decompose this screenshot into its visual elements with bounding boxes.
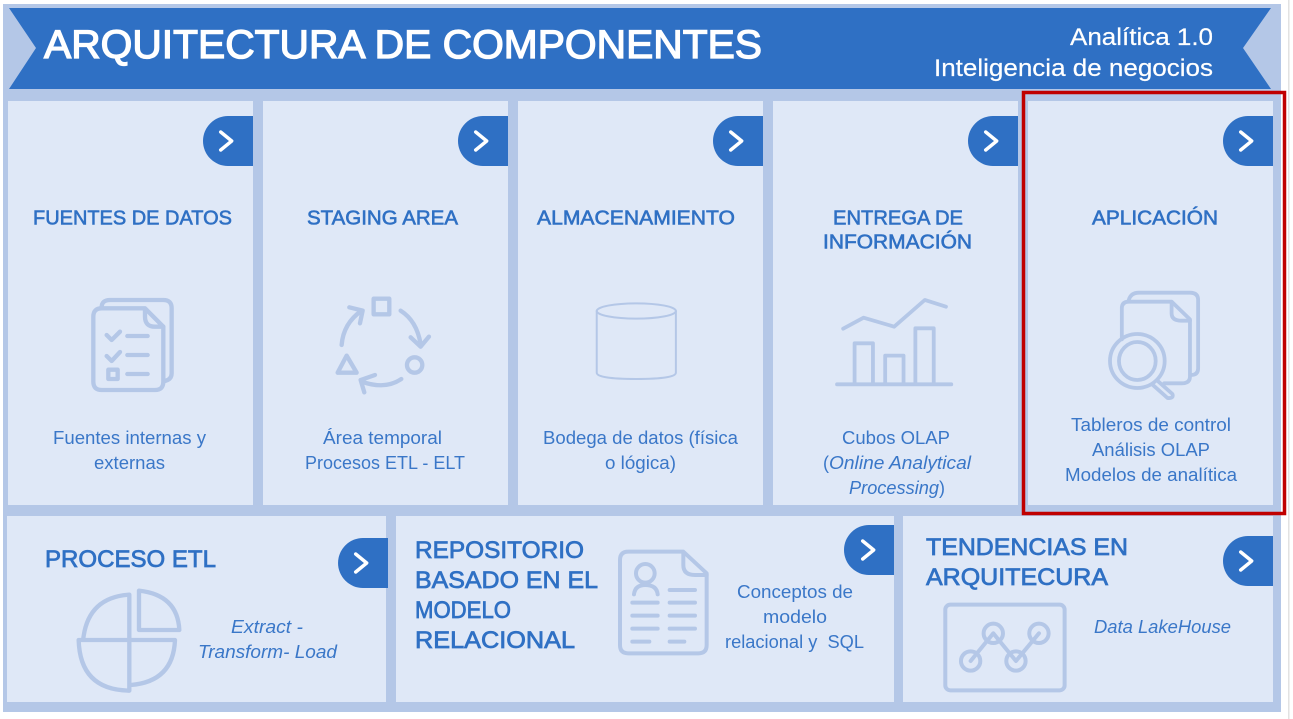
panel background bbox=[263, 101, 508, 505]
description: Área temporal bbox=[323, 428, 442, 448]
heading: STAGING AREA bbox=[307, 208, 459, 230]
description: Bodega de datos (física bbox=[543, 428, 739, 448]
heading bbox=[926, 534, 1128, 591]
heading: FUENTES DE DATOS bbox=[33, 208, 232, 230]
description: Fuentes internas y bbox=[53, 428, 206, 448]
panel: tendencias bbox=[903, 516, 1273, 702]
banner ribbon bbox=[9, 8, 1271, 89]
description: ( bbox=[823, 453, 829, 473]
heading: APLICACIÓN bbox=[1092, 206, 1218, 230]
heading: REPOSITORIO bbox=[415, 537, 584, 564]
panel: almacenamiento bbox=[518, 101, 763, 505]
description: Processing bbox=[849, 478, 939, 498]
heading: ENTREGA DE bbox=[833, 208, 963, 230]
icon: pie chart bbox=[79, 591, 179, 691]
panel background bbox=[518, 101, 763, 505]
arrow tab bbox=[338, 538, 388, 588]
heading: INFORMACIÓN bbox=[823, 230, 972, 254]
panel background bbox=[1028, 101, 1273, 505]
scrollbar edge bbox=[1288, 0, 1290, 719]
panel: repositorio bbox=[396, 516, 894, 702]
description bbox=[53, 428, 206, 473]
description: o lógica) bbox=[605, 453, 676, 473]
arrow tab bbox=[1223, 116, 1273, 166]
description bbox=[823, 428, 972, 498]
panel background bbox=[773, 101, 1018, 505]
description: Tableros de control bbox=[1071, 415, 1231, 435]
heading: ALMACENAMIENTO bbox=[537, 208, 735, 230]
panel background bbox=[7, 516, 386, 702]
subtitle bbox=[934, 24, 1213, 82]
icon: resume document bbox=[620, 552, 707, 653]
description: Transform- Load bbox=[198, 642, 338, 662]
description: Cubos OLAP bbox=[842, 428, 950, 448]
description: Conceptos de bbox=[737, 582, 853, 602]
arrow tab bbox=[203, 116, 253, 166]
heading: ARQUITECURA bbox=[926, 564, 1108, 591]
panel background bbox=[903, 516, 1273, 702]
subtitle: Analítica 1.0 bbox=[1070, 24, 1213, 51]
description: externas bbox=[94, 453, 165, 473]
arrow tab bbox=[968, 116, 1018, 166]
panel: proceso etl bbox=[7, 516, 388, 702]
arrow tab bbox=[844, 525, 894, 575]
heading bbox=[415, 537, 598, 654]
header banner bbox=[9, 8, 1271, 89]
description: Modelos de analítica bbox=[1065, 465, 1238, 485]
description bbox=[1065, 415, 1238, 485]
panel: entrega de informacion bbox=[773, 101, 1018, 505]
heading: PROCESO ETL bbox=[45, 546, 216, 573]
arrow tab bbox=[458, 116, 508, 166]
description: modelo bbox=[763, 607, 827, 627]
icon: bar and line chart bbox=[837, 300, 951, 384]
description bbox=[725, 582, 864, 652]
description bbox=[543, 428, 739, 473]
panel background bbox=[396, 516, 894, 702]
heading: TENDENCIAS EN bbox=[926, 534, 1128, 561]
heading: RELACIONAL bbox=[415, 627, 575, 654]
description bbox=[305, 428, 465, 473]
heading: MODELO bbox=[415, 597, 511, 624]
panel: fuentes de datos bbox=[8, 101, 253, 505]
icon: checklist document bbox=[93, 300, 172, 390]
arrow tab bbox=[1223, 536, 1273, 586]
icon: documents with magnifier bbox=[1110, 293, 1198, 398]
panel: staging area bbox=[263, 101, 508, 505]
icon: database cylinder bbox=[597, 303, 676, 379]
description bbox=[198, 617, 338, 662]
heading bbox=[823, 208, 972, 254]
panel: aplicacion bbox=[1028, 101, 1273, 505]
arrow tab bbox=[713, 116, 763, 166]
description: ) bbox=[939, 478, 945, 498]
description: Procesos ETL - ELT bbox=[305, 453, 465, 473]
description: Extract - bbox=[231, 617, 303, 637]
heading: BASADO EN EL bbox=[415, 567, 598, 594]
description: Data LakeHouse bbox=[1094, 617, 1231, 637]
icon: line chart on screen bbox=[945, 605, 1065, 690]
panel background bbox=[8, 101, 253, 505]
description: Online Analytical bbox=[829, 453, 972, 473]
icon: cycle of shapes bbox=[338, 299, 429, 392]
description: Análisis OLAP bbox=[1092, 440, 1210, 460]
title: ARQUITECTURA DE COMPONENTES bbox=[44, 23, 762, 67]
red highlight frame bbox=[1024, 92, 1284, 514]
subtitle: Inteligencia de negocios bbox=[934, 55, 1213, 82]
description: relacional y SQL bbox=[725, 632, 864, 652]
